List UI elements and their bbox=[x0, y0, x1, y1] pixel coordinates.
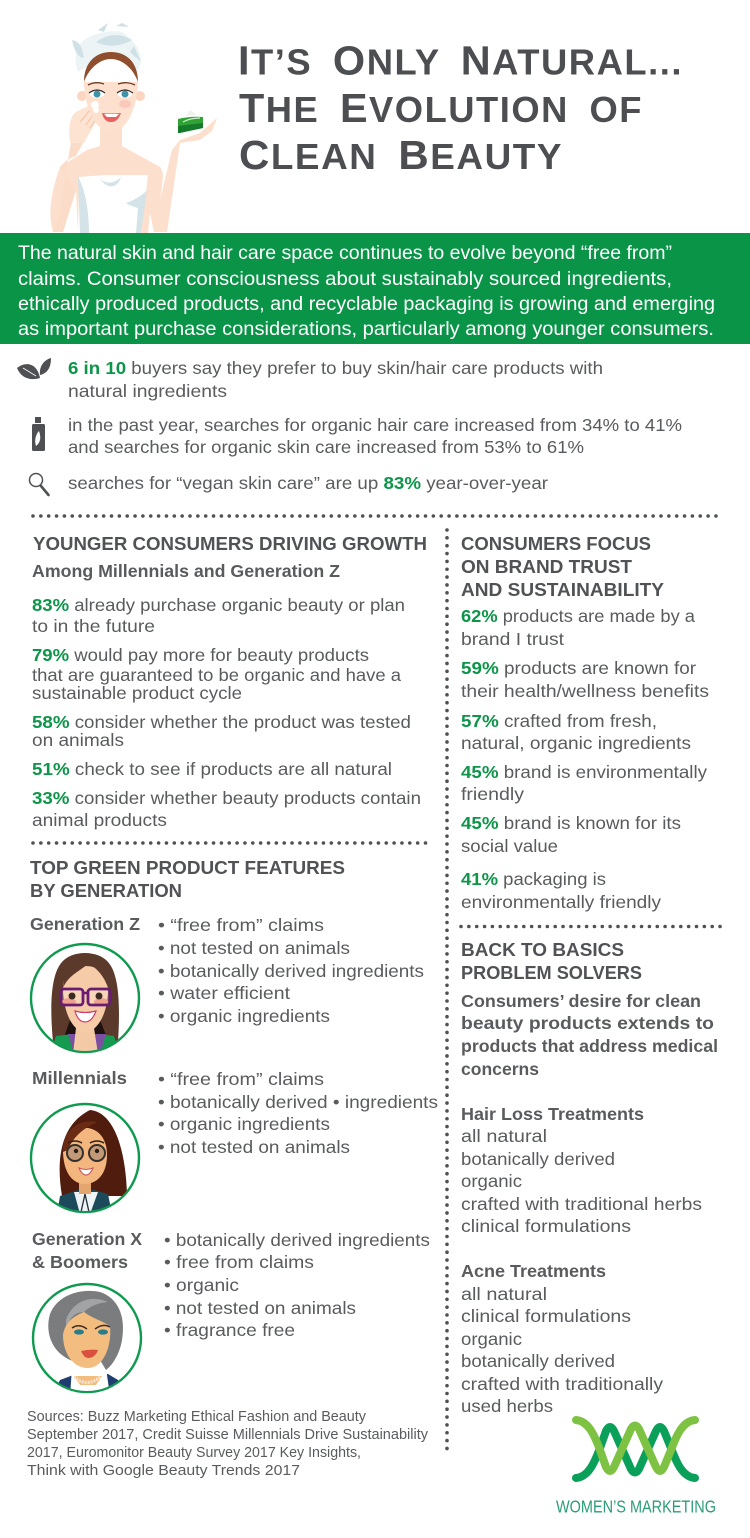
panel: back to basics problem solvers: botanically derived bbox=[461, 1351, 615, 1371]
panel: brand trust and sustainability: CONSUMERS FOCUS bbox=[461, 534, 651, 554]
list: generation z features: • organic ingredients bbox=[158, 1006, 330, 1026]
title bbox=[238, 38, 683, 178]
panel: younger consumers driving growth: on animals bbox=[32, 730, 124, 750]
list: generation x and boomers features: • free from claims bbox=[164, 1252, 314, 1272]
sources: Think with Google Beauty Trends 2017 bbox=[27, 1463, 300, 1479]
panel: back to basics problem solvers: Acne Treatments bbox=[461, 1261, 606, 1281]
panel: brand trust and sustainability: their health/wellness benefits bbox=[461, 681, 709, 701]
panel: brand trust and sustainability: ON BRAND TRUST bbox=[461, 557, 632, 577]
heading: top green product features bbox=[30, 858, 345, 901]
list: generation x and boomers features: • not tested on animals bbox=[164, 1298, 356, 1318]
title: CLEAN BEAUTY bbox=[239, 132, 563, 178]
list: generation z features: • “free from” claims bbox=[158, 915, 324, 935]
panel: brand trust and sustainability: brand I trust bbox=[461, 629, 564, 649]
panel: back to basics problem solvers: clinical formulations bbox=[461, 1216, 631, 1236]
panel: brand trust and sustainability: 59% products are known for bbox=[461, 658, 696, 678]
panel: brand trust and sustainability: 57% crafted from fresh, bbox=[461, 711, 657, 731]
panel: green intro banner: ethically produced products, and recyclable packaging is growing and emerging bbox=[18, 293, 715, 315]
label: generation z: Generation Z bbox=[30, 914, 140, 934]
panel: younger consumers driving growth: sustainable product cycle bbox=[32, 683, 242, 703]
list: generation z features: • water efficient bbox=[158, 983, 290, 1003]
label: millennials: Millennials bbox=[32, 1068, 127, 1088]
panel: younger consumers driving growth: 33% consider whether beauty products contain bbox=[32, 788, 421, 808]
list: generation x and boomers features: • organic bbox=[164, 1275, 239, 1295]
stat: natural ingredients: 6 in 10 buyers say they prefer to buy skin/hair care products with bbox=[68, 358, 603, 378]
panel: green intro banner: claims. Consumer consciousness about sustainably sourced ingredients, bbox=[18, 268, 672, 290]
list: generation x and boomers features bbox=[164, 1230, 430, 1340]
list: millennials features bbox=[158, 1069, 438, 1157]
panel: back to basics problem solvers: organic bbox=[461, 1329, 522, 1349]
panel: back to basics problem solvers: Hair Loss Treatments bbox=[461, 1104, 644, 1124]
panel: back to basics problem solvers: beauty products extends to bbox=[461, 1013, 714, 1033]
panel: back to basics problem solvers: all natural bbox=[461, 1126, 547, 1146]
list: generation z features bbox=[158, 915, 424, 1026]
panel: younger consumers driving growth: 51% check to see if products are all natural bbox=[32, 759, 392, 779]
panel: back to basics problem solvers: Consumers’ desire for clean bbox=[461, 991, 701, 1011]
panel: back to basics problem solvers: used herbs bbox=[461, 1396, 553, 1416]
panel: brand trust and sustainability: natural, organic ingredients bbox=[461, 733, 691, 753]
stat: organic searches bbox=[68, 415, 682, 457]
panel: brand trust and sustainability: 45% brand is environmentally bbox=[461, 762, 707, 782]
panel: brand trust and sustainability: friendly bbox=[461, 784, 524, 804]
list: generation z features: • botanically derived ingredients bbox=[158, 961, 424, 981]
panel: back to basics problem solvers: BACK TO BASICS bbox=[461, 940, 624, 960]
heading: top green product features: TOP GREEN PRODUCT FEATURES bbox=[30, 858, 345, 878]
stat: vegan searches: searches for “vegan skin care” are up 83% year-over-year bbox=[68, 473, 548, 493]
label: generation x and boomers bbox=[32, 1229, 142, 1272]
panel: younger consumers driving growth: YOUNGER CONSUMERS DRIVING GROWTH bbox=[33, 534, 427, 554]
panel: back to basics problem solvers: PROBLEM SOLVERS bbox=[461, 963, 642, 983]
panel: younger consumers driving growth: to in the future bbox=[32, 616, 155, 636]
panel: back to basics problem solvers: products that address medical bbox=[461, 1036, 718, 1056]
list: millennials features: • organic ingredients bbox=[158, 1114, 330, 1134]
panel: brand trust and sustainability bbox=[461, 534, 709, 912]
panel: brand trust and sustainability: 62% products are made by a bbox=[461, 606, 695, 626]
heading: top green product features: BY GENERATION bbox=[30, 881, 182, 901]
icon: bottle bbox=[32, 417, 45, 451]
panel: back to basics problem solvers: organic bbox=[461, 1171, 522, 1191]
panel: green intro banner: The natural skin and hair care space continues to evolve beyond “free from” bbox=[18, 242, 672, 264]
illustration: woman applying cream bbox=[50, 23, 217, 233]
panel: younger consumers driving growth: that are guaranteed to be organic and have a bbox=[32, 665, 401, 685]
logo: women's marketing: WOMEN’S MARKETING bbox=[556, 1496, 716, 1516]
panel: back to basics problem solvers: botanically derived bbox=[461, 1149, 615, 1169]
panel: younger consumers driving growth: 79% would pay more for beauty products bbox=[32, 645, 369, 665]
avatar: generation z bbox=[31, 944, 139, 1054]
stat: organic searches: in the past year, searches for organic hair care increased from 34% to 41% bbox=[68, 415, 682, 435]
list: millennials features: • botanically derived • ingredients bbox=[158, 1092, 438, 1112]
panel: back to basics problem solvers: concerns bbox=[461, 1059, 539, 1079]
panel: green intro banner bbox=[0, 233, 750, 344]
icon: leaves bbox=[17, 358, 51, 379]
title: THE EVOLUTION OF bbox=[239, 85, 643, 131]
title: IT’S ONLY NATURAL... bbox=[238, 38, 683, 84]
list: millennials features: • not tested on animals bbox=[158, 1137, 350, 1157]
panel: brand trust and sustainability: 45% brand is known for its bbox=[461, 813, 681, 833]
panel: brand trust and sustainability: social value bbox=[461, 836, 558, 856]
panel: brand trust and sustainability: 41% packaging is bbox=[461, 869, 606, 889]
panel: back to basics problem solvers: all natural bbox=[461, 1284, 547, 1304]
sources: Sources: Buzz Marketing Ethical Fashion and Beauty bbox=[27, 1409, 367, 1425]
list: generation z features: • not tested on animals bbox=[158, 938, 350, 958]
panel: back to basics problem solvers: clinical formulations bbox=[461, 1306, 631, 1326]
panel: younger consumers driving growth: 83% already purchase organic beauty or plan bbox=[32, 595, 405, 615]
stat: natural ingredients: natural ingredients bbox=[68, 381, 227, 401]
panel: younger consumers driving growth: Among Millennials and Generation Z bbox=[32, 561, 340, 581]
sources: 2017, Euromonitor Beauty Survey 2017 Key Insights, bbox=[27, 1445, 361, 1461]
panel: younger consumers driving growth: animal products bbox=[32, 810, 167, 830]
logo: women's marketing bbox=[556, 1420, 716, 1516]
label: generation x and boomers: & Boomers bbox=[32, 1252, 128, 1272]
list: millennials features: • “free from” claims bbox=[158, 1069, 324, 1089]
avatar: millennials bbox=[31, 1104, 139, 1214]
stat: natural ingredients bbox=[68, 358, 603, 401]
panel: brand trust and sustainability: environmentally friendly bbox=[461, 892, 661, 912]
icon: magnifying glass bbox=[30, 474, 48, 495]
panel: younger consumers driving growth: 58% consider whether the product was tested bbox=[32, 712, 411, 732]
panel: green intro banner: as important purchase considerations, particularly among younger consumers. bbox=[18, 318, 714, 340]
stat: organic searches: and searches for organic skin care increased from 53% to 61% bbox=[68, 437, 584, 457]
avatar: generation x and boomers bbox=[33, 1284, 141, 1396]
list: generation x and boomers features: • fragrance free bbox=[164, 1320, 295, 1340]
sources: September 2017, Credit Suisse Millennials Drive Sustainability bbox=[27, 1427, 429, 1443]
label: generation x and boomers: Generation X bbox=[32, 1229, 142, 1249]
panel: younger consumers driving growth bbox=[32, 534, 427, 830]
panel: back to basics problem solvers: crafted with traditional herbs bbox=[461, 1194, 702, 1214]
list: generation x and boomers features: • botanically derived ingredients bbox=[164, 1230, 430, 1250]
panel: back to basics problem solvers: crafted with traditionally bbox=[461, 1374, 663, 1394]
sources bbox=[27, 1409, 429, 1479]
panel: back to basics problem solvers bbox=[461, 940, 718, 1416]
panel: brand trust and sustainability: AND SUSTAINABILITY bbox=[461, 580, 664, 600]
